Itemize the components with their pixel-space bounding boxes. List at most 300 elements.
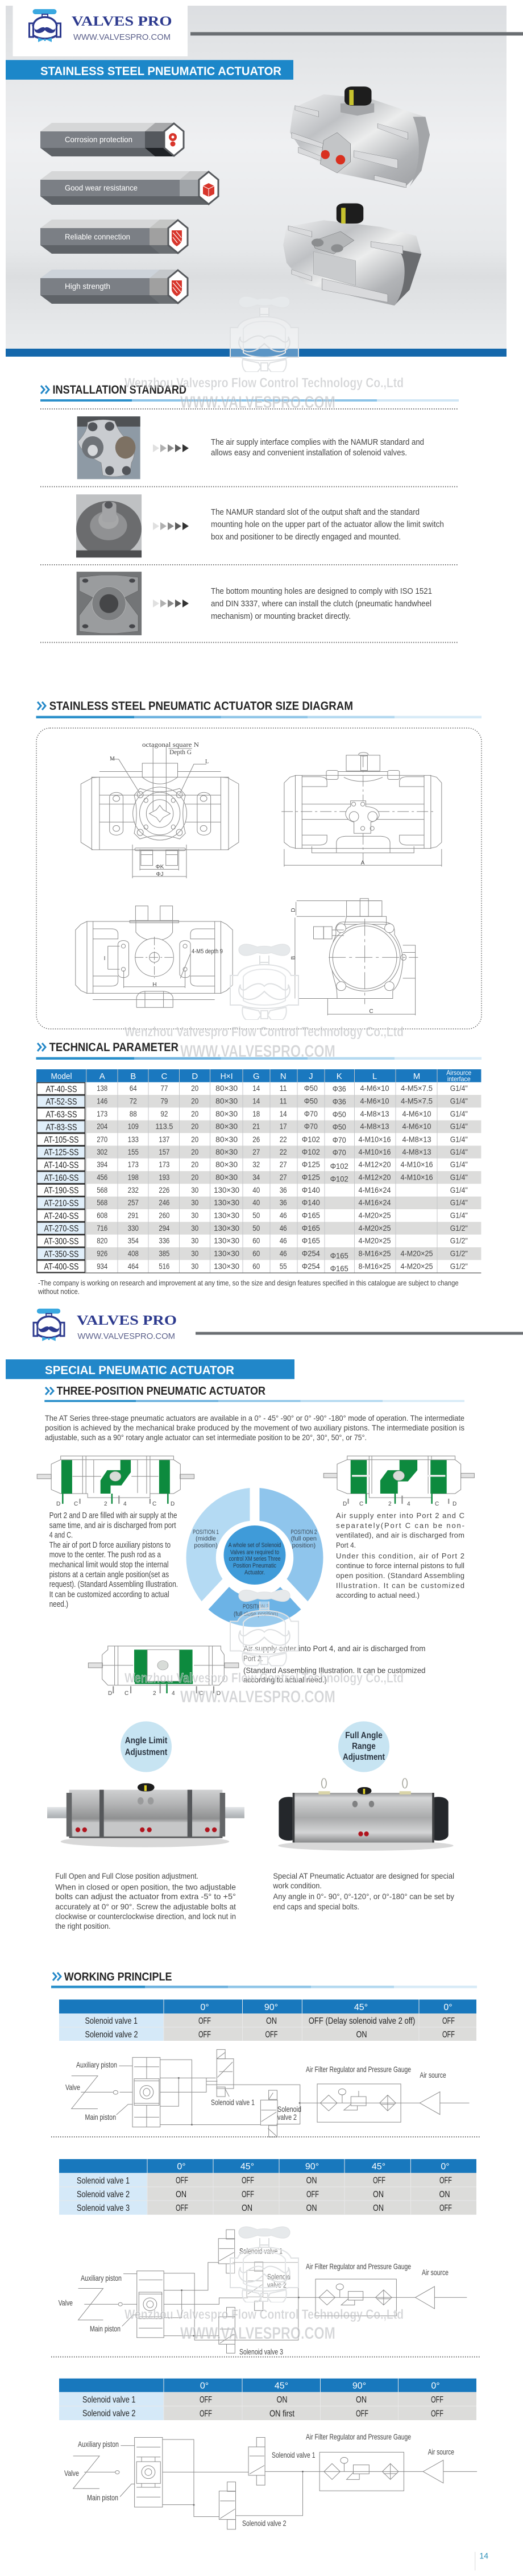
table: working sequence 1: Solenoid valve 1 xyxy=(85,2016,138,2026)
table values: 130×30 xyxy=(214,1236,239,1245)
dotted separator xyxy=(51,2356,481,2358)
donut diagram: three positions: Valves are required to xyxy=(230,1549,279,1556)
table values: 394 xyxy=(97,1160,107,1169)
table values: 72 xyxy=(130,1097,137,1106)
table values: 14 xyxy=(280,1109,287,1118)
table values: 30 xyxy=(191,1185,198,1194)
table values: 60 xyxy=(252,1262,260,1271)
text: position 1: request). (Standard Assembling Illustration. xyxy=(49,1580,178,1589)
circuit diagram 2: Main piston xyxy=(90,2324,121,2333)
circuit diagram 3 xyxy=(64,2432,477,2529)
dotted separators xyxy=(40,409,459,643)
text: angle limit: clockwise or counterclockwise direction, and lock nut in xyxy=(55,1912,236,1921)
table values: 4-M10×16 xyxy=(400,1160,433,1169)
donut diagram: three positions: Actuator. xyxy=(244,1569,265,1576)
parameter table: AT-40-SS xyxy=(45,1085,77,1094)
table values: 4-M20×25 xyxy=(358,1210,391,1219)
feature: corrosion protection xyxy=(40,123,184,156)
text: angle limit: accurately at 0° or 90°. Screw the adjustable bolts at xyxy=(55,1902,236,1911)
table values: 50 xyxy=(252,1210,260,1219)
segment: position 3 xyxy=(208,1587,301,1627)
table: working sequence 2: OFF xyxy=(373,2176,385,2185)
text: air supply interface xyxy=(211,438,424,457)
circuit diagram 2 xyxy=(59,2230,467,2356)
circuit diagram 2: Auxiliary piston xyxy=(81,2273,122,2283)
icon: double chevron xyxy=(45,1387,53,1395)
circuit diagram 3: Solenoid valve 2 xyxy=(242,2519,287,2528)
circuit diagram 1: Auxiliary piston xyxy=(76,2060,117,2069)
mechanism diagram: position 1: C xyxy=(74,1501,78,1507)
table values: G1/4" xyxy=(450,1122,468,1131)
table values: Φ36 xyxy=(333,1084,346,1093)
text: position 2: Under this condition, air of Port 2 xyxy=(336,1552,464,1560)
section heading: size diagram xyxy=(36,700,482,718)
table: working sequence 1: OFF xyxy=(442,2030,455,2040)
drawing: front view with flange xyxy=(81,741,239,878)
circuit diagram 2: Valve xyxy=(59,2298,73,2307)
mechanism diagram: position 1: C xyxy=(152,1501,156,1507)
text: air supply interface: The air supply interface complies with the NAMUR standard and xyxy=(211,438,424,447)
parameter table: AT-83-SS xyxy=(45,1123,77,1132)
table values: G1/2" xyxy=(450,1249,468,1258)
table values: 20 xyxy=(191,1109,198,1118)
text: bottom mounting xyxy=(211,587,432,621)
table: working sequence 1: 45° xyxy=(354,2003,368,2012)
text: output shaft: The NAMUR standard slot of the output shaft and the standard xyxy=(211,508,420,517)
table values: Φ140 xyxy=(302,1198,320,1207)
table values: 4-M20×25 xyxy=(358,1236,391,1245)
table values: 926 xyxy=(97,1249,107,1258)
donut diagram: three positions xyxy=(186,1488,323,1627)
table values: 80×30 xyxy=(215,1097,238,1106)
page number xyxy=(475,2552,488,2570)
second page rule xyxy=(196,1332,523,1335)
table values: Φ125 xyxy=(302,1160,320,1169)
text: position 1 xyxy=(49,1511,178,1609)
arrows row 1 xyxy=(153,444,189,452)
table values: 260 xyxy=(159,1210,170,1219)
mechanism diagram: position 3: D xyxy=(108,1690,112,1697)
table: working sequence 2: OFF xyxy=(176,2203,188,2213)
product photo: stainless actuator top xyxy=(290,86,430,188)
circuit diagram 1: Air source xyxy=(420,2070,446,2079)
table values: 40 xyxy=(252,1185,260,1194)
parameter table: AT-300-SS xyxy=(44,1237,78,1247)
table values: 4-M10×16 xyxy=(400,1173,433,1182)
table values: 80×30 xyxy=(215,1084,238,1093)
table: working sequence 1: OFF xyxy=(442,2016,455,2026)
text: position 3 xyxy=(243,1644,425,1684)
table values: 354 xyxy=(128,1236,139,1245)
table values: 336 xyxy=(159,1236,170,1245)
product photo: angle limit actuator xyxy=(47,1783,244,1847)
table values: Φ254 xyxy=(302,1262,320,1271)
table: working sequence 1: 0° xyxy=(443,2003,453,2012)
watermark 1: WWW.VALVESPRO.COM xyxy=(180,393,335,412)
table: working sequence 2: OFF xyxy=(439,2176,452,2185)
table values: 80×30 xyxy=(215,1135,238,1144)
table: working sequence 2: ON xyxy=(306,2176,317,2185)
circuit diagram 2: Solenoid xyxy=(267,2272,290,2281)
table values: 20 xyxy=(191,1135,198,1144)
table values: Φ102 xyxy=(330,1174,348,1183)
table values: G1/4" xyxy=(450,1185,468,1194)
table values: 302 xyxy=(97,1147,107,1156)
callout: angle limit adjustment: Adjustment xyxy=(125,1747,168,1758)
table: working sequence 1: ON xyxy=(356,2030,367,2040)
logo block: Valves Pro: WWW.VALVESPRO.COM xyxy=(73,32,171,42)
title banner xyxy=(6,60,293,80)
table: working sequence 3: OFF xyxy=(431,2409,443,2418)
text: position 3: (Standard Assembling Illustration. It can be customized xyxy=(243,1665,425,1674)
circuit diagram 2: Solenoid valve 3 xyxy=(239,2347,283,2356)
table values: 291 xyxy=(128,1210,139,1219)
page number: 14 xyxy=(479,2552,488,2561)
table values: 80×30 xyxy=(215,1122,238,1131)
table values: 385 xyxy=(159,1249,170,1258)
table values: 130×30 xyxy=(214,1262,239,1271)
table: working sequence 2: Solenoid valve 2 xyxy=(77,2190,130,2199)
table values: 4-M16×24 xyxy=(358,1198,391,1207)
table values: 27 xyxy=(280,1160,287,1169)
table values: 568 xyxy=(97,1198,107,1207)
segment: position 1 xyxy=(186,1488,250,1601)
text: position 2: separately(Port C can be non- xyxy=(336,1521,464,1530)
header rule xyxy=(190,32,523,35)
table: working sequence 1: 90° xyxy=(264,2003,278,2012)
donut diagram: three positions: POSITION 1 xyxy=(193,1529,219,1536)
title banner: special actuator: SPECIAL PNEUMATIC ACTUATOR xyxy=(45,1364,234,1377)
table values: 130×30 xyxy=(214,1210,239,1219)
circuit diagram 3: Main piston xyxy=(87,2493,118,2502)
table values: 157 xyxy=(159,1147,170,1156)
table values: 4-M5×7.5 xyxy=(401,1097,433,1106)
drawing: front view with flange: M xyxy=(110,756,115,762)
arrows row 2 xyxy=(153,522,189,530)
drawing: side view with namur plate xyxy=(281,752,442,867)
icon: double chevron xyxy=(38,702,45,710)
mechanism diagram: position 3: 4 xyxy=(172,1690,175,1697)
table values: Φ254 xyxy=(302,1249,320,1258)
table values: 60 xyxy=(252,1249,260,1258)
mechanism diagram: position 3: 2 xyxy=(153,1690,156,1697)
arrows row 3 xyxy=(153,599,189,607)
parameter table: AT-240-SS xyxy=(44,1211,78,1221)
mechanism diagram: position 2: D xyxy=(343,1501,347,1507)
table values: 4-M10×16 xyxy=(358,1135,391,1144)
table values: 4-M16×24 xyxy=(358,1185,391,1194)
table values: 4-M6×10 xyxy=(402,1122,431,1131)
mechanism diagram: position 1: D xyxy=(171,1501,175,1507)
watermark 1: Wenzhou Valvespro Flow Control Technology Co.,Ltd xyxy=(124,375,404,391)
table values: 130×30 xyxy=(214,1223,239,1233)
text: angle limit: Full Open and Full Close position adjustment. xyxy=(55,1871,198,1880)
table values: Φ50 xyxy=(304,1097,318,1106)
logo block: Valves Pro: VALVES PRO xyxy=(72,14,172,29)
table header: L xyxy=(372,1072,377,1081)
product photo: stainless actuator bottom xyxy=(283,203,421,305)
table: working sequence 2: ON xyxy=(373,2190,384,2199)
icon: red gears xyxy=(169,133,177,147)
table values: 46 xyxy=(280,1236,287,1245)
table values: G1/4" xyxy=(450,1135,468,1144)
table values: 4-M6×10 xyxy=(360,1084,389,1093)
table values: 80×30 xyxy=(215,1173,238,1182)
mechanism diagram: position 1: 4 xyxy=(123,1501,127,1507)
table header: C xyxy=(161,1072,167,1081)
donut diagram: three positions: (full open xyxy=(291,1536,317,1543)
table values: G1/4" xyxy=(450,1173,468,1182)
drawing: rear view: I xyxy=(104,956,105,962)
table values: 20 xyxy=(191,1173,198,1182)
table values: 198 xyxy=(128,1173,139,1182)
table values: 330 xyxy=(128,1223,139,1233)
table values: Φ165 xyxy=(302,1223,320,1233)
table values: 36 xyxy=(280,1198,287,1207)
dotted separator xyxy=(51,2136,481,2137)
table values: 130×30 xyxy=(214,1249,239,1258)
product photo: full angle actuator xyxy=(278,1779,454,1851)
table values: G1/4" xyxy=(450,1097,468,1106)
table values: 46 xyxy=(280,1249,287,1258)
mechanism diagram: position 3: C xyxy=(124,1690,128,1697)
callout: angle limit adjustment: Angle Limit xyxy=(125,1736,168,1746)
table values: 4-M6×10 xyxy=(360,1097,389,1106)
drawing: rear view: H xyxy=(152,982,157,988)
text: angle limit: When in closed or open position, the two adjustable xyxy=(55,1883,236,1892)
table: working sequence 3 xyxy=(59,2379,476,2420)
table values: 204 xyxy=(97,1122,107,1131)
table values: Φ70 xyxy=(304,1122,318,1131)
table: working sequence 3: 0° xyxy=(200,2381,209,2391)
watermark 4: Wenzhou Valvespro Flow Control Technology Co.,Ltd xyxy=(124,2307,404,2322)
icon: double chevron xyxy=(38,1043,45,1051)
table values: G1/4" xyxy=(450,1084,468,1093)
table values: 138 xyxy=(97,1084,107,1093)
donut diagram: three positions: POSITION 3 xyxy=(243,1603,269,1610)
table values: 4-M6×10 xyxy=(402,1109,431,1118)
table values: 60 xyxy=(252,1236,260,1245)
circuit diagram 3: Air Filter Regulator and Pressure Gauge xyxy=(306,2432,411,2441)
table: working sequence 2: ON xyxy=(242,2203,252,2213)
table: working sequence 1: ON xyxy=(266,2016,277,2026)
table: working sequence 3: 0° xyxy=(431,2381,440,2391)
donut diagram: three positions: (middle xyxy=(196,1536,216,1543)
table values: 716 xyxy=(97,1223,107,1233)
drawing: front view with flange: Depth G xyxy=(169,748,192,756)
table values: 88 xyxy=(130,1109,137,1118)
table values xyxy=(97,1084,468,1273)
table values: 26 xyxy=(252,1135,260,1144)
drawing: front view with flange: ΦJ xyxy=(156,871,163,878)
mechanism diagram: position 1 xyxy=(37,1456,194,1507)
table values: 22 xyxy=(280,1147,287,1156)
title banner: special actuator xyxy=(6,1359,294,1379)
table values: 34 xyxy=(252,1173,260,1182)
photo: output shaft xyxy=(76,494,142,557)
table values: 14 xyxy=(252,1097,260,1106)
table: working sequence 2: 90° xyxy=(305,2162,319,2172)
circuit diagram 3: Valve xyxy=(64,2469,79,2478)
table values: 30 xyxy=(191,1198,198,1207)
table values: Φ102 xyxy=(302,1147,320,1156)
text: position 3: Port 2. xyxy=(243,1653,263,1663)
circuit diagram 3: Auxiliary piston xyxy=(78,2439,119,2449)
table values: 92 xyxy=(160,1109,168,1118)
table values: 820 xyxy=(97,1236,107,1245)
table header: D xyxy=(192,1072,198,1081)
table header xyxy=(36,1069,481,1083)
table: working sequence 3: OFF xyxy=(200,2395,212,2405)
segment: position 2 xyxy=(259,1488,323,1601)
feature: high strength: High strength xyxy=(65,282,110,291)
table values: 40 xyxy=(252,1198,260,1207)
mechanism diagram: position 1: D xyxy=(56,1501,60,1507)
table values: Φ165 xyxy=(302,1236,320,1245)
table values: 257 xyxy=(128,1198,139,1207)
table values: 4-M8×13 xyxy=(402,1135,431,1144)
table: working sequence 3: ON xyxy=(276,2395,288,2405)
intro paragraph: position is achieved by the mechanical brake produced by the movement of two auxiliary pistons. The intermediate position is xyxy=(45,1423,464,1432)
table values: Φ36 xyxy=(333,1097,346,1106)
table values: 130×30 xyxy=(214,1185,239,1194)
circuit diagram 1: Main piston xyxy=(85,2112,116,2122)
section heading: three-position xyxy=(44,1385,464,1402)
table values: 80×30 xyxy=(215,1160,238,1169)
section heading: installation standard xyxy=(40,383,459,402)
feature: high strength xyxy=(40,270,188,304)
hero bottom band xyxy=(6,349,507,357)
watermark 2: WWW.VALVESPRO.COM xyxy=(180,1042,335,1061)
table values: 4-M12×20 xyxy=(358,1173,391,1182)
table values: G1/4" xyxy=(450,1147,468,1156)
section heading: installation standard: INSTALLATION STANDARD xyxy=(52,383,186,396)
watermark 4: WWW.VALVESPRO.COM xyxy=(180,2324,335,2343)
table values: 173 xyxy=(97,1109,107,1118)
logo block: Valves Pro xyxy=(13,6,188,56)
text: position 2: continue to force internal pistons to full xyxy=(336,1561,464,1570)
watermark 4 xyxy=(124,2227,404,2343)
drawing: front view with flange: ΦK xyxy=(156,864,164,870)
mechanism diagram: position 3 xyxy=(88,1646,239,1697)
icon: double chevron xyxy=(41,386,49,394)
table values: Φ70 xyxy=(304,1109,318,1118)
text: position 2: open position. (Standard Assembling xyxy=(336,1571,464,1580)
text: output shaft xyxy=(211,508,444,541)
table header: Airsource xyxy=(446,1069,471,1077)
table values: 464 xyxy=(128,1262,139,1271)
table values: 27 xyxy=(280,1173,287,1182)
table values: 14 xyxy=(252,1084,260,1093)
table values: Φ50 xyxy=(333,1110,346,1119)
table column rules xyxy=(86,1069,437,1273)
table values: Φ50 xyxy=(333,1122,346,1131)
mechanism diagram: position 2: 4 xyxy=(407,1501,410,1507)
feature: reliable connection xyxy=(40,220,188,254)
table values: 32 xyxy=(252,1160,260,1169)
parameter table: AT-63-SS xyxy=(45,1110,77,1119)
table values: 113.5 xyxy=(155,1122,173,1131)
text: output shaft: box and positioner to be directly engaged and mounted. xyxy=(211,532,401,541)
icon: double chevron xyxy=(53,1973,61,1980)
text: position 2: according to actual need.) xyxy=(336,1591,420,1599)
drawing: end view: C xyxy=(369,1008,373,1015)
drawing: end view: B xyxy=(290,956,297,960)
center circle xyxy=(224,1525,285,1585)
table values: G1/4" xyxy=(450,1198,468,1207)
drawing: front view with flange: octagonal square N xyxy=(142,741,199,749)
table values: 20 xyxy=(191,1084,198,1093)
text: position 3: Air supply enter into Port 4, and air is discharged from xyxy=(243,1644,425,1653)
table values: 46 xyxy=(280,1210,287,1219)
table values: 21 xyxy=(252,1122,260,1131)
watermark 3 xyxy=(124,1590,404,1706)
mechanism diagram: position 2 xyxy=(323,1456,474,1507)
table values: 294 xyxy=(159,1223,170,1233)
feature: good wear resistance xyxy=(40,171,218,205)
table values: Φ70 xyxy=(333,1135,346,1144)
text: angle limit: the right position. xyxy=(55,1921,110,1930)
table footnote: without notice. xyxy=(38,1287,80,1296)
title banner: STAINLESS STEEL PNEUMATIC ACTUATOR xyxy=(40,65,281,78)
table values: 30 xyxy=(191,1223,198,1233)
mechanism diagram: position 3: D xyxy=(217,1690,221,1697)
table values: G1/2" xyxy=(450,1223,468,1233)
table values: 22 xyxy=(280,1135,287,1144)
icon: red shield xyxy=(172,280,182,296)
table values: 30 xyxy=(191,1262,198,1271)
table values: 193 xyxy=(159,1173,170,1182)
table values: 79 xyxy=(160,1097,168,1106)
feature: reliable connection: Reliable connection xyxy=(65,232,130,241)
table values: 516 xyxy=(159,1262,170,1271)
section heading: technical parameter: TECHNICAL PARAMETER xyxy=(49,1041,179,1054)
circuit diagram 1: Air Filter Regulator and Pressure Gauge xyxy=(306,2065,411,2074)
table values: 408 xyxy=(128,1249,139,1258)
drawing: front view with flange: L xyxy=(205,759,209,765)
table header: interface xyxy=(447,1075,471,1083)
text: bottom mounting: and DIN 3337, where can install the clutch (pneumatic handwheel xyxy=(211,599,431,609)
table: working sequence 2: ON xyxy=(306,2203,317,2213)
parameter table: AT-105-SS xyxy=(44,1135,78,1145)
table header: B xyxy=(130,1072,136,1081)
icon: red cube xyxy=(203,183,214,197)
hero panel background xyxy=(6,6,507,353)
table values: 456 xyxy=(97,1173,107,1182)
table values: 4-M20×25 xyxy=(358,1223,391,1233)
logo block: second page: WWW.VALVESPRO.COM xyxy=(77,1332,175,1341)
table: working sequence 2: 0° xyxy=(441,2162,450,2172)
table: working sequence 1: 0° xyxy=(200,2003,209,2012)
circuit diagram 1: Solenoid xyxy=(277,2104,301,2114)
drawing: rear view xyxy=(76,906,233,1007)
circuit diagram 2: Solenoid valve 1 xyxy=(239,2247,283,2256)
table values: Φ70 xyxy=(333,1148,346,1157)
table: working sequence 1 xyxy=(59,2000,476,2041)
donut diagram: three positions: POSITION 2 xyxy=(290,1529,317,1536)
parameter table: AT-400-SS xyxy=(44,1262,78,1272)
icon: red shield xyxy=(172,230,182,246)
text: position 2: Illustration. It can be customized xyxy=(336,1581,464,1590)
text: air supply interface: allows easy and convenient installation of solenoid valves. xyxy=(211,448,407,457)
table: working sequence 2: OFF xyxy=(306,2190,319,2199)
table: working sequence 3: 90° xyxy=(352,2381,366,2391)
table values: 173 xyxy=(128,1160,139,1169)
text: position 1: The air of port D force auxiliary pistons to xyxy=(49,1541,171,1550)
table values: 109 xyxy=(128,1122,139,1131)
table: working sequence 3: OFF xyxy=(200,2409,212,2418)
text: position 1: need.) xyxy=(49,1600,68,1609)
